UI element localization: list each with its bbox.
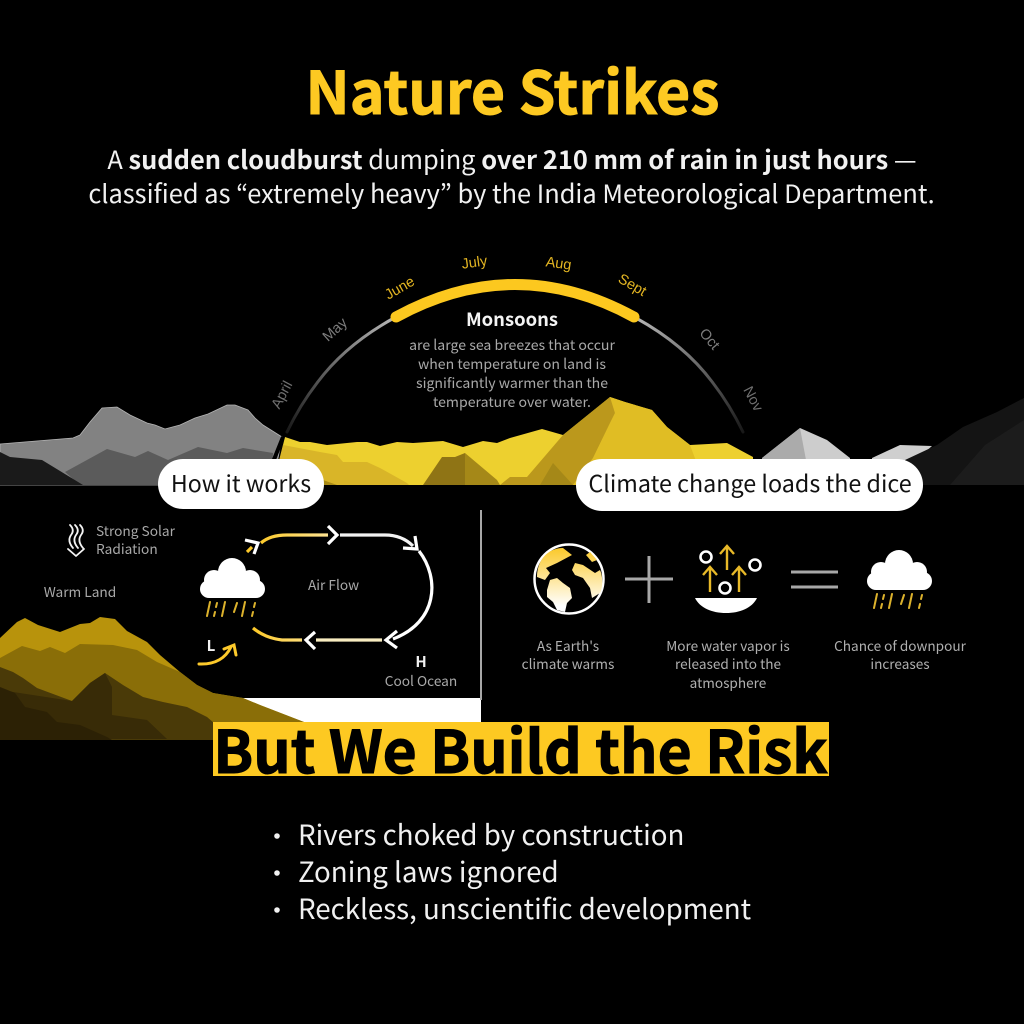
label: air flow: Air Flow (308, 574, 359, 594)
icon: water vapor (695, 546, 760, 613)
month labels: May (320, 314, 351, 345)
label: strong solar radiation (96, 520, 176, 558)
high pressure label (385, 651, 457, 690)
caption: water vapor: released into the (675, 653, 781, 673)
heading: but we build the risk: But We Build the Risk (213, 705, 828, 790)
caption: earth warms: climate warms (522, 653, 614, 673)
caption: water vapor: More water vapor is (666, 635, 790, 655)
bullet list: Reckless, unscientific development (298, 887, 752, 927)
yellow mountains (273, 397, 753, 485)
pill: climate change: Climate change loads the dice (588, 465, 912, 499)
caption: downpour: increases (870, 653, 930, 673)
low pressure marker (199, 635, 236, 664)
caption: downpour (834, 635, 967, 673)
pill: how it works (158, 459, 324, 509)
label: strong solar radiation: Radiation (96, 538, 158, 558)
monsoons description: Monsoons (466, 306, 558, 332)
pill: how it works: How it works (171, 465, 311, 499)
month labels: April (269, 379, 296, 412)
bullet list: Zoning laws ignored (298, 850, 559, 890)
label: strong solar radiation: Strong Solar (96, 520, 176, 540)
icon: earth (534, 544, 604, 614)
month labels: June (382, 274, 418, 303)
icon: rain cloud left (200, 558, 265, 616)
month labels: Aug (545, 254, 572, 274)
subtitle text (88, 141, 935, 211)
monsoons description: when temperature on land is (418, 354, 606, 374)
caption: water vapor: atmosphere (690, 672, 766, 692)
caption: earth warms: As Earth's (537, 635, 599, 655)
warm land hills (0, 617, 304, 740)
air flow diagram (245, 526, 432, 649)
high pressure label: H (415, 651, 427, 672)
label: warm land: Warm Land (44, 581, 116, 601)
bullet list (274, 813, 752, 927)
caption: downpour: Chance of downpour (834, 635, 967, 655)
pill: climate change (576, 459, 923, 511)
month labels: Nov (739, 384, 766, 415)
left gray mountains (0, 405, 282, 485)
month labels: July (461, 253, 489, 273)
month labels: Sept (615, 271, 649, 300)
title: Nature Strikes (306, 46, 719, 131)
subtitle text: classified as “extremely heavy” by the India Meteorological Department. (88, 175, 935, 211)
white band (235, 698, 481, 724)
subtitle text: A sudden cloudburst dumping over 210 mm of rain in just hours — (107, 141, 917, 177)
high pressure label: Cool Ocean (385, 670, 457, 690)
monsoons description: are large sea breezes that occur (409, 335, 615, 355)
month labels (269, 253, 766, 415)
monsoon arc (287, 284, 743, 432)
bullet list: Rivers choked by construction (298, 813, 684, 853)
right gray mountains (762, 398, 1024, 485)
caption: earth warms (522, 635, 614, 673)
equals sign (791, 572, 838, 587)
monsoons description: temperature over water. (433, 392, 591, 412)
caption: water vapor (666, 635, 790, 692)
panel divider (480, 510, 482, 700)
month labels: Oct (696, 326, 722, 353)
monsoons description (409, 306, 615, 412)
plus sign (625, 556, 673, 603)
icon: rain cloud right (867, 550, 932, 608)
icon: solar radiation (68, 525, 84, 556)
monsoons description: significantly warmer than the (416, 373, 608, 393)
low pressure marker: L (207, 635, 216, 656)
